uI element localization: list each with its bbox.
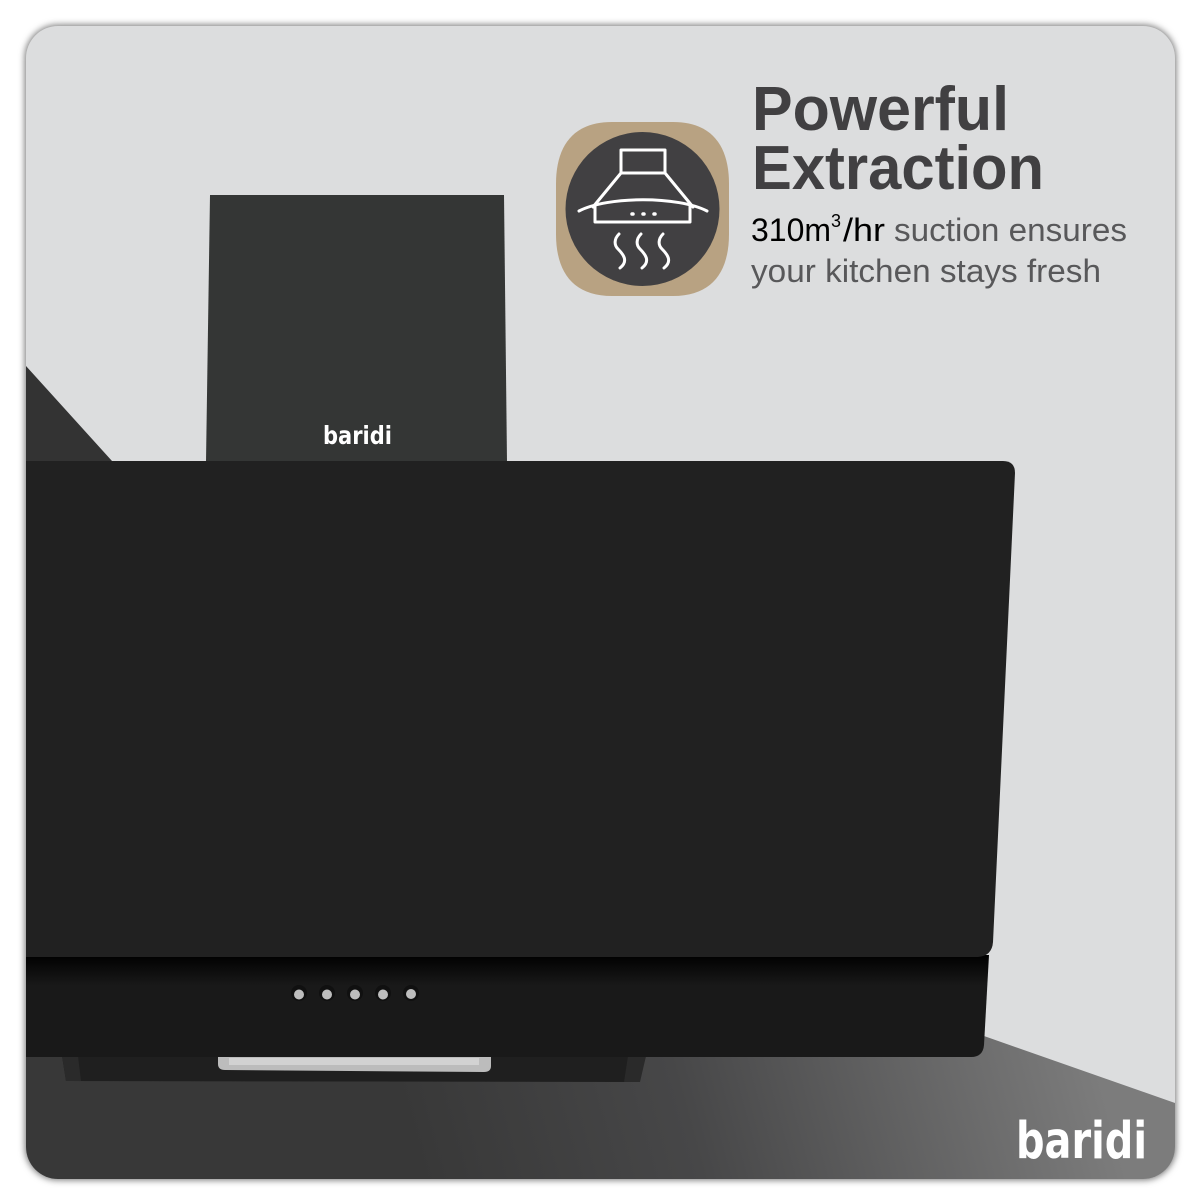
hood underside with handle [62, 1056, 646, 1082]
hood glass front panel [0, 461, 1015, 957]
description text: 310m [751, 212, 831, 248]
floor [0, 1036, 1200, 1200]
heading: Powerful [752, 75, 1009, 144]
description text: /hr [843, 212, 885, 248]
hood lower panel [0, 955, 989, 1057]
icon: dark circle [566, 132, 720, 286]
icon: tan badge [556, 122, 729, 296]
feature icon [556, 122, 729, 296]
chimney logo: baridi [323, 421, 392, 450]
steel handle [218, 1056, 491, 1072]
icon: cooker hood and fumes [579, 150, 707, 268]
chimney duct [206, 195, 507, 462]
wall shadow triangle [26, 366, 112, 461]
description text: suction ensures [894, 212, 1127, 248]
description text: your kitchen stays fresh [751, 253, 1101, 289]
heading: Extraction [752, 134, 1044, 203]
control buttons [291, 985, 419, 1001]
description text: 3 [831, 211, 841, 231]
description text [751, 211, 1127, 289]
